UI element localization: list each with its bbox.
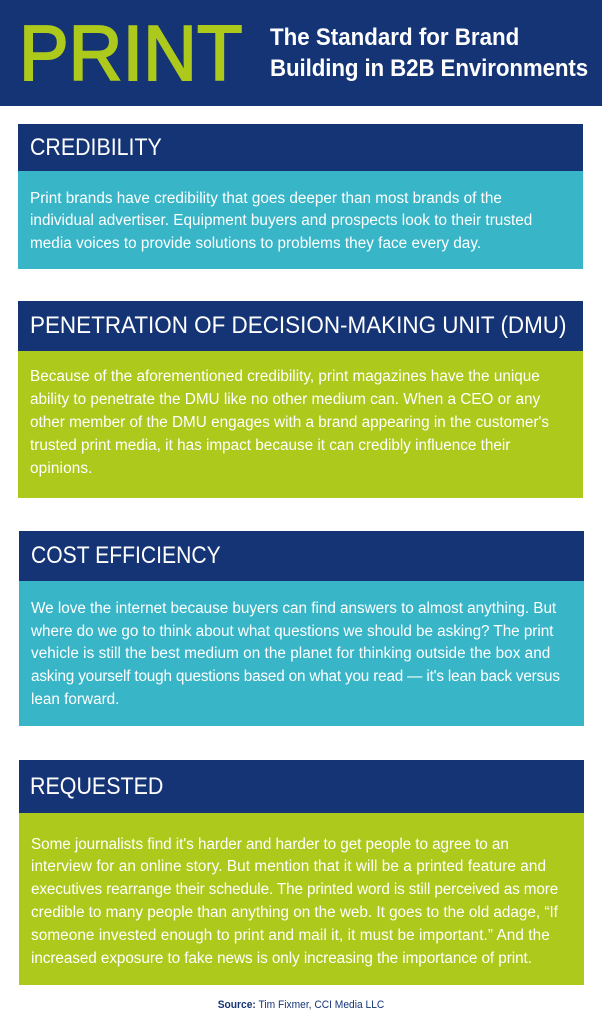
text: penetration: trusted print media, it has impact because it can credibly influence their [30,437,510,454]
text: requested: interview for an online story. But mention that it will be a printed feature and [31,858,546,875]
heading: credibility: CREDIBILITY [30,134,162,161]
subtitle: The Standard for Brand [270,24,519,51]
title: PRINT: PRINT [19,9,242,97]
panel: cost efficiency [19,531,584,726]
text: credibility: individual advertiser. Equipment buyers and prospects look to their trusted [30,212,532,229]
panel: credibility [18,124,583,269]
heading: credibility [18,124,583,171]
heading: penetration [18,301,583,351]
text: credibility: Print brands have credibility that goes deeper than most brands of the [30,190,502,206]
header banner [0,0,602,106]
heading: cost efficiency [19,531,584,581]
text: cost efficiency: vehicle is still the best medium on the planet for thinking outside the box and [31,645,550,662]
text: requested: someone invested enough to print and mail it, it must be important.” And the [31,927,550,944]
text: requested: executives rearrange their schedule. The printed word is still perceived as more [31,881,558,898]
text: cost efficiency: where do we go to think about what questions we should be asking? The print [31,623,553,640]
text: credibility: media voices to provide solutions to problems they face every day. [30,235,481,252]
panel: penetration of DMU [18,301,583,498]
text: credibility [18,171,583,269]
heading: cost efficiency: COST EFFICIENCY [31,542,221,569]
heading: requested [19,760,584,813]
text: penetration: Because of the aforementioned credibility, print magazines have the unique [30,368,540,385]
text: requested: credible to many people than anything on the web. It goes to the old adage, “If [31,904,558,921]
source line: Source: Tim Fixmer, CCI Media LLC [218,999,384,1011]
text: penetration: other member of the DMU engages with a brand appearing in the customer's [30,414,549,431]
text: cost efficiency [19,581,584,726]
text: cost efficiency: asking yourself tough questions based on what you read — it's lean back versus [31,668,560,685]
text: penetration [18,351,583,498]
text: requested [19,813,584,985]
subtitle: Building in B2B Environments [270,54,588,82]
text: requested: increased exposure to fake news is only increasing the importance of print. [31,950,532,967]
text: cost efficiency: We love the internet because buyers can find answers to almost anything. But [31,600,556,617]
text: requested: Some journalists find it's harder and harder to get people to agree to an [31,836,509,852]
subtitle [270,24,588,82]
text: penetration: opinions. [30,460,93,477]
heading: penetration: PENETRATION OF DECISION-MAKING UNIT (DMU) [30,312,567,339]
text: penetration: ability to penetrate the DMU like no other medium can. When a CEO or any [30,391,540,408]
panel: requested [19,760,584,985]
heading: requested: REQUESTED [30,773,163,800]
text: cost efficiency: lean forward. [31,691,119,708]
